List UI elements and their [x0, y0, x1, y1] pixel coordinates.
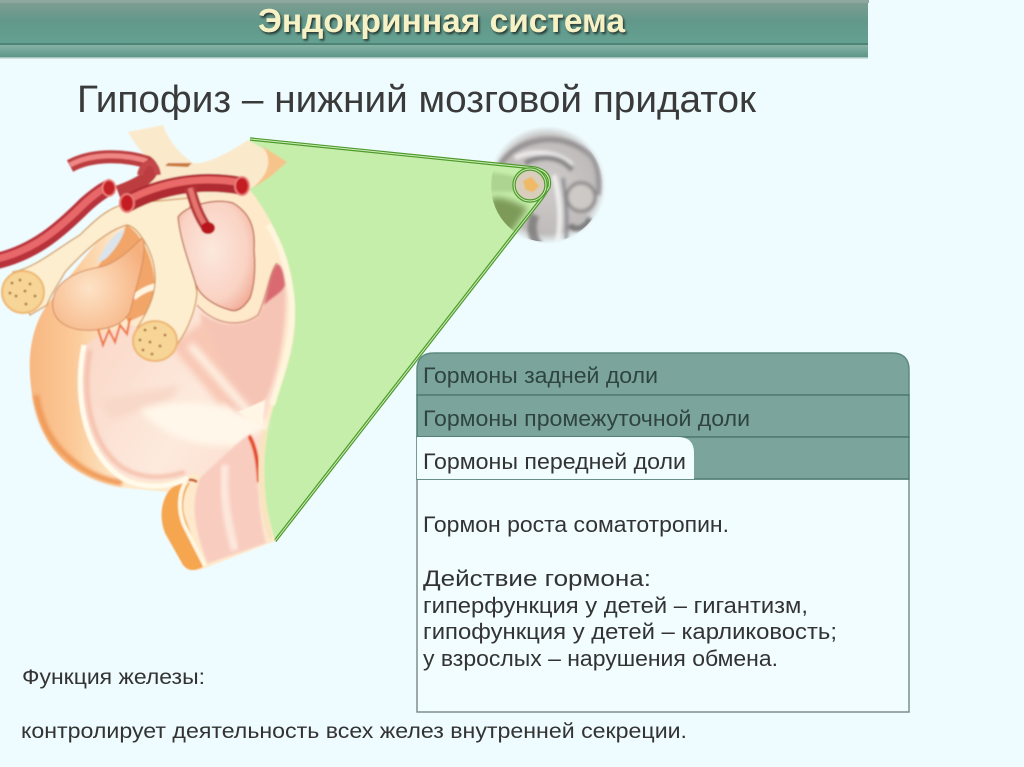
cut section left	[2, 271, 44, 313]
right artery	[128, 183, 242, 203]
inner pink area	[82, 263, 287, 564]
tab: posterior lobe: Гормоны задней доли	[423, 363, 658, 388]
hormone tabs panel	[417, 353, 909, 712]
cut vessel upper	[102, 180, 116, 196]
header title: Эндокринная система	[258, 2, 626, 39]
cream tract arch	[13, 198, 197, 350]
panel text: action: гиперфункция у детей – гигантизм,	[423, 593, 808, 618]
gland function text: Функция железы:	[22, 666, 205, 689]
cream bands	[80, 345, 188, 486]
pink rays top	[170, 320, 235, 405]
loop artery	[140, 163, 158, 175]
panel text: action: у взрослых – нарушения обмена.	[423, 646, 778, 671]
panel text: action: гипофункция у детей – карликовость;	[423, 619, 837, 644]
left artery	[0, 186, 112, 261]
main title: Гипофиз – нижний мозговой придаток	[77, 79, 756, 121]
top stalk	[128, 125, 287, 205]
hole behind tract	[97, 225, 155, 322]
panel body	[417, 479, 909, 712]
brain thumbnail	[494, 128, 604, 242]
white fan	[140, 403, 268, 446]
panel text: action	[423, 566, 837, 671]
pituitary detail in circle	[515, 170, 545, 200]
lower stalk	[195, 434, 265, 563]
orange outer edge	[36, 395, 122, 483]
header band	[0, 0, 869, 58]
tab: anterior lobe active	[417, 437, 909, 479]
outer body of gland	[30, 190, 295, 570]
pituitary anatomy illustration	[0, 125, 295, 570]
tab: intermediate lobe	[417, 395, 909, 437]
stalk fold	[162, 483, 203, 570]
tab: posterior lobe	[417, 353, 909, 395]
cut section lower	[133, 321, 177, 361]
upper lobe	[178, 201, 255, 311]
pink right region	[200, 263, 286, 418]
rounded bulb	[53, 237, 144, 330]
tab: intermediate lobe: Гормоны промежуточной доли	[423, 406, 750, 431]
upper artery branch	[70, 157, 152, 192]
green magnification wedge	[249, 137, 552, 542]
panel text: action: Действие гормона:	[423, 566, 651, 591]
gland function text: контролирует деятельность всех желез внутренней секреции.	[21, 720, 687, 743]
descending vessel	[190, 188, 207, 228]
gland function text	[21, 666, 687, 743]
bulb fringes	[98, 318, 130, 345]
inner pink edge	[87, 350, 185, 477]
panel text: hormone: Гормон роста соматотропин.	[423, 512, 729, 537]
tab: anterior lobe active: Гормоны передней доли	[423, 449, 686, 474]
